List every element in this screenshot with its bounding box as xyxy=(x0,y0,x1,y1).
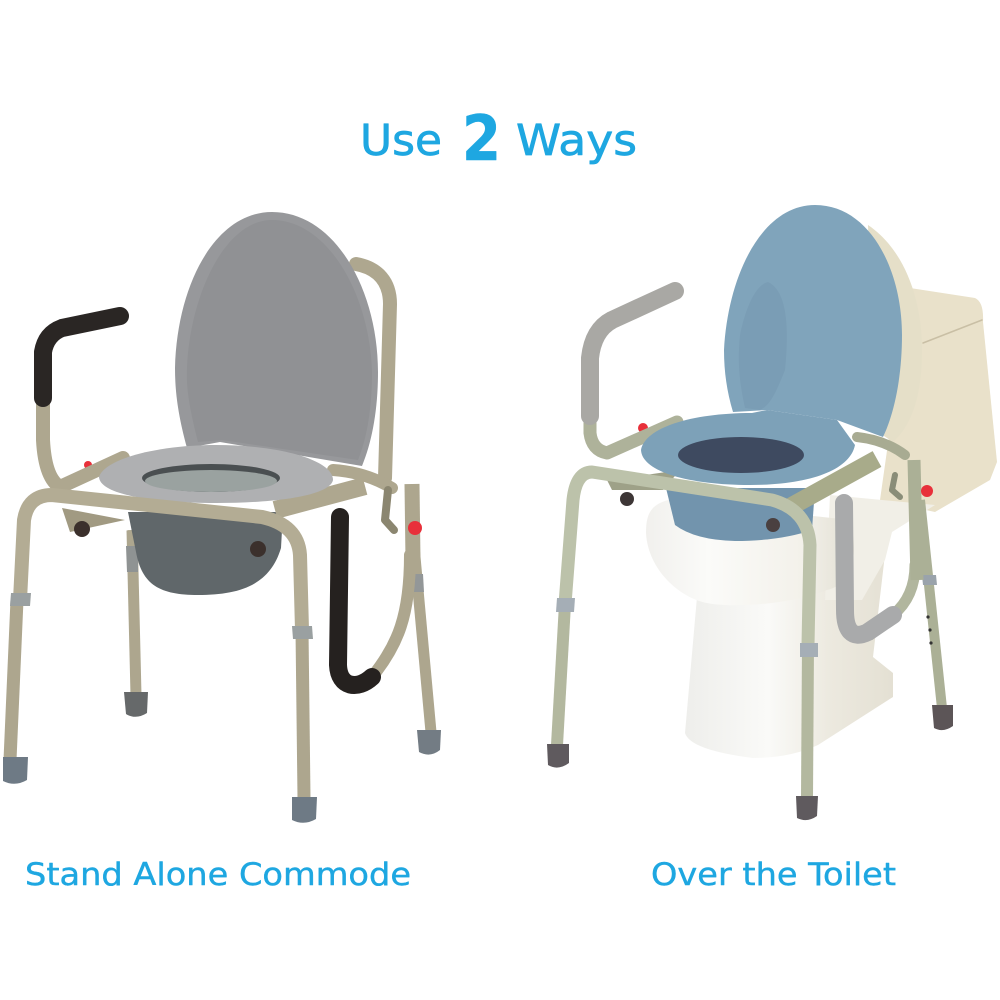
red knob xyxy=(408,521,422,535)
front left leg xyxy=(3,593,31,784)
cream seat edge xyxy=(868,225,922,442)
rear right leg xyxy=(920,500,953,730)
front right leg xyxy=(292,626,317,823)
rear right leg xyxy=(411,535,441,755)
bucket xyxy=(128,512,283,595)
left arm xyxy=(43,316,123,487)
front right leg xyxy=(796,643,818,820)
blue seat xyxy=(641,410,855,485)
knobs xyxy=(74,521,90,537)
left plate xyxy=(607,470,680,490)
caption: over the toilet: Over the Toilet xyxy=(651,857,896,893)
blue bucket xyxy=(666,488,815,541)
title: Use xyxy=(360,116,442,166)
toilet bowl xyxy=(646,500,854,605)
tank lid seam xyxy=(923,320,982,343)
front frame xyxy=(20,495,302,630)
left arm xyxy=(590,291,677,453)
cross plates xyxy=(275,486,365,510)
toilet tank xyxy=(880,288,997,512)
rear left leg xyxy=(124,530,148,717)
post and rails xyxy=(790,437,933,580)
toilet ledge xyxy=(825,495,935,600)
post xyxy=(412,484,413,560)
gray seat xyxy=(99,445,333,503)
side rail and hook xyxy=(333,470,392,488)
title: Ways xyxy=(516,116,637,166)
knobs xyxy=(620,492,634,506)
title: 2 xyxy=(462,102,501,175)
back frame xyxy=(356,264,390,478)
title xyxy=(360,102,637,175)
over the toilet illustration xyxy=(547,205,997,820)
blue lid xyxy=(724,205,902,437)
caption: stand alone commode: Stand Alone Commode xyxy=(25,857,411,893)
toilet base xyxy=(685,537,893,758)
front frame xyxy=(565,472,810,645)
drop-down arm right xyxy=(338,517,410,685)
gray lid xyxy=(175,212,378,466)
front left leg xyxy=(547,598,575,768)
stand alone commode illustration xyxy=(3,212,441,823)
drop-down arm xyxy=(844,503,915,635)
